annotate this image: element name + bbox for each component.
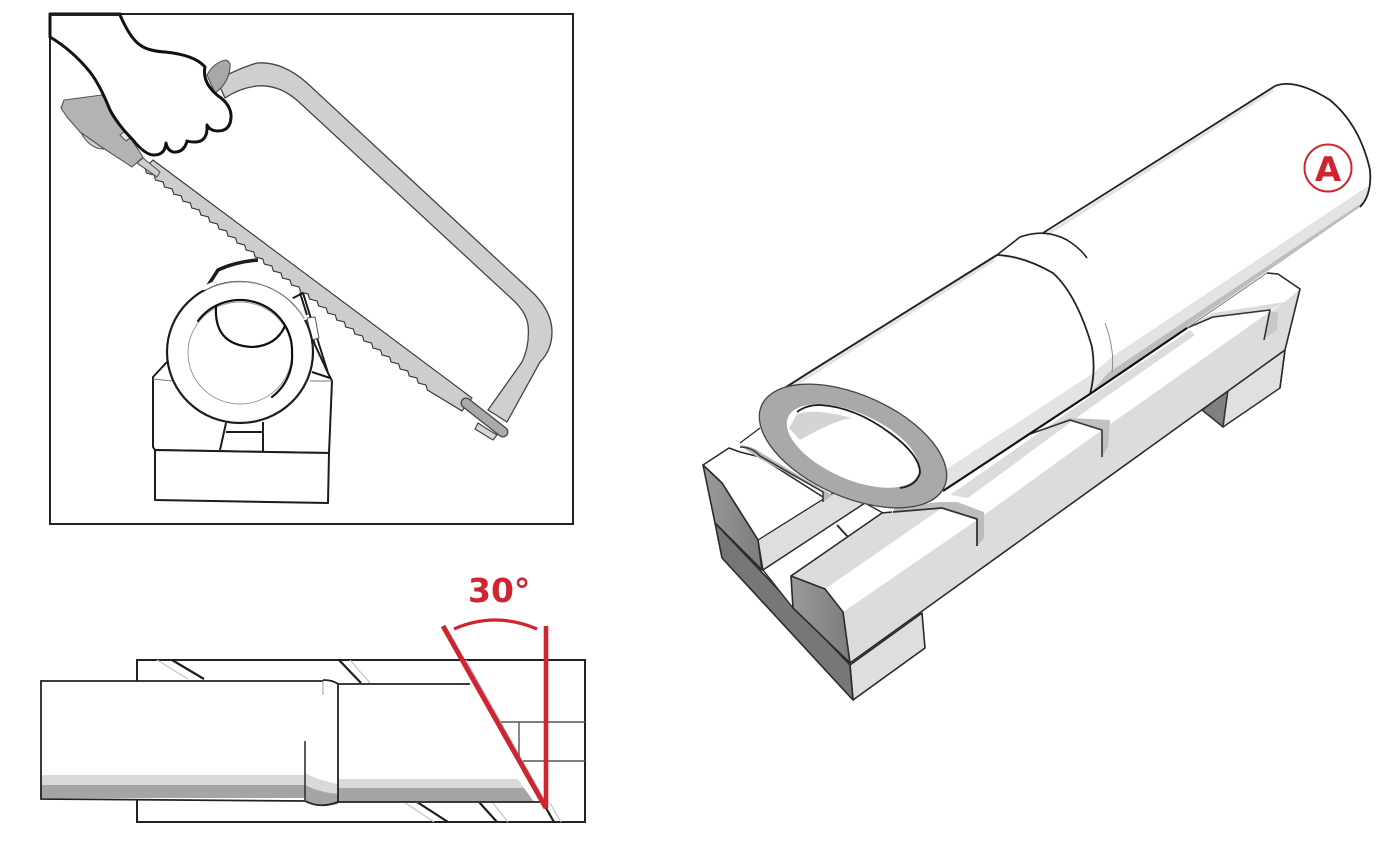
label A marker: A <box>1315 150 1342 190</box>
hand gripping the saw <box>50 14 231 155</box>
pipe end view <box>167 279 313 423</box>
pipe cut end ring <box>741 359 965 533</box>
large pipe body <box>767 84 1370 491</box>
hacksaw blade <box>145 160 472 411</box>
red cut angle lines <box>443 620 546 808</box>
panel: pipe on wooden stand <box>703 84 1370 700</box>
left rail <box>703 428 865 570</box>
hacksaw frame <box>217 63 552 422</box>
blade pin and wing nut <box>466 403 503 440</box>
saw handle <box>61 60 230 177</box>
panel: sawing the pipe <box>49 14 573 524</box>
right rail <box>791 273 1300 663</box>
pipe side view <box>41 680 545 806</box>
wooden block end view <box>153 260 332 503</box>
near leg and lower beam <box>715 523 925 700</box>
shadow under pipe <box>950 330 1195 498</box>
base board <box>137 660 585 822</box>
centre gap between rails <box>763 503 883 608</box>
angle label: 30° <box>468 571 530 610</box>
label A marker <box>1304 144 1352 192</box>
board slots <box>157 660 585 822</box>
panel: side view with 30 degree cut <box>41 571 585 822</box>
far leg <box>1202 350 1285 427</box>
rail notches <box>740 310 1278 546</box>
